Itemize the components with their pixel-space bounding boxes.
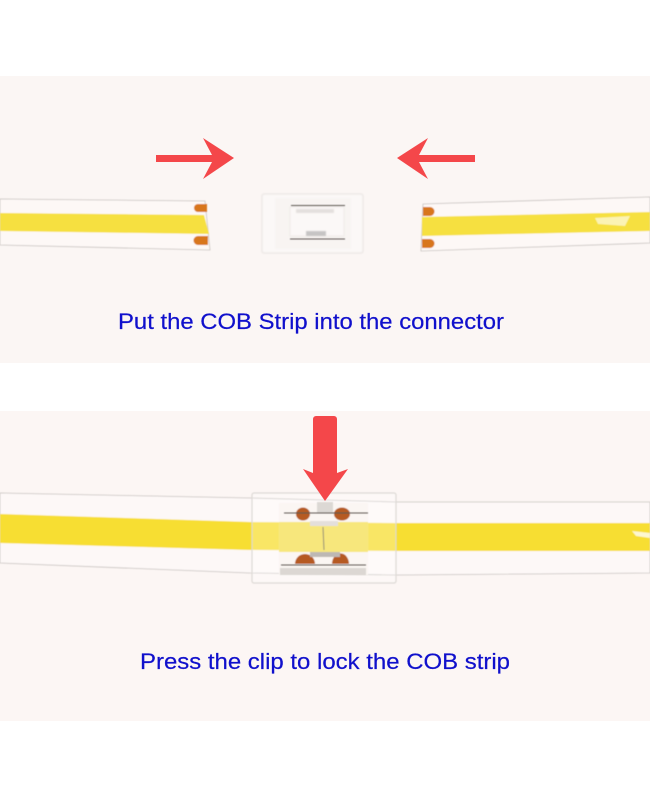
contact pads xyxy=(295,508,350,564)
panel: step 2 xyxy=(0,411,650,721)
connector contact lines xyxy=(290,206,345,239)
arrow: left-pointing xyxy=(397,138,475,179)
arrow: right-pointing xyxy=(156,138,234,179)
caption: step 2: Press the clip to lock the COB strip xyxy=(140,649,510,674)
left COB strip xyxy=(0,199,210,250)
connector clip xyxy=(252,493,396,583)
joined COB strip xyxy=(0,493,650,575)
caption: step 1: Put the COB Strip into the connector xyxy=(118,309,505,334)
panel: step 1 xyxy=(0,76,650,363)
clip contact lines xyxy=(281,513,368,565)
arrow: down-pointing xyxy=(303,416,348,501)
connector xyxy=(262,194,363,253)
right COB strip xyxy=(421,197,650,251)
